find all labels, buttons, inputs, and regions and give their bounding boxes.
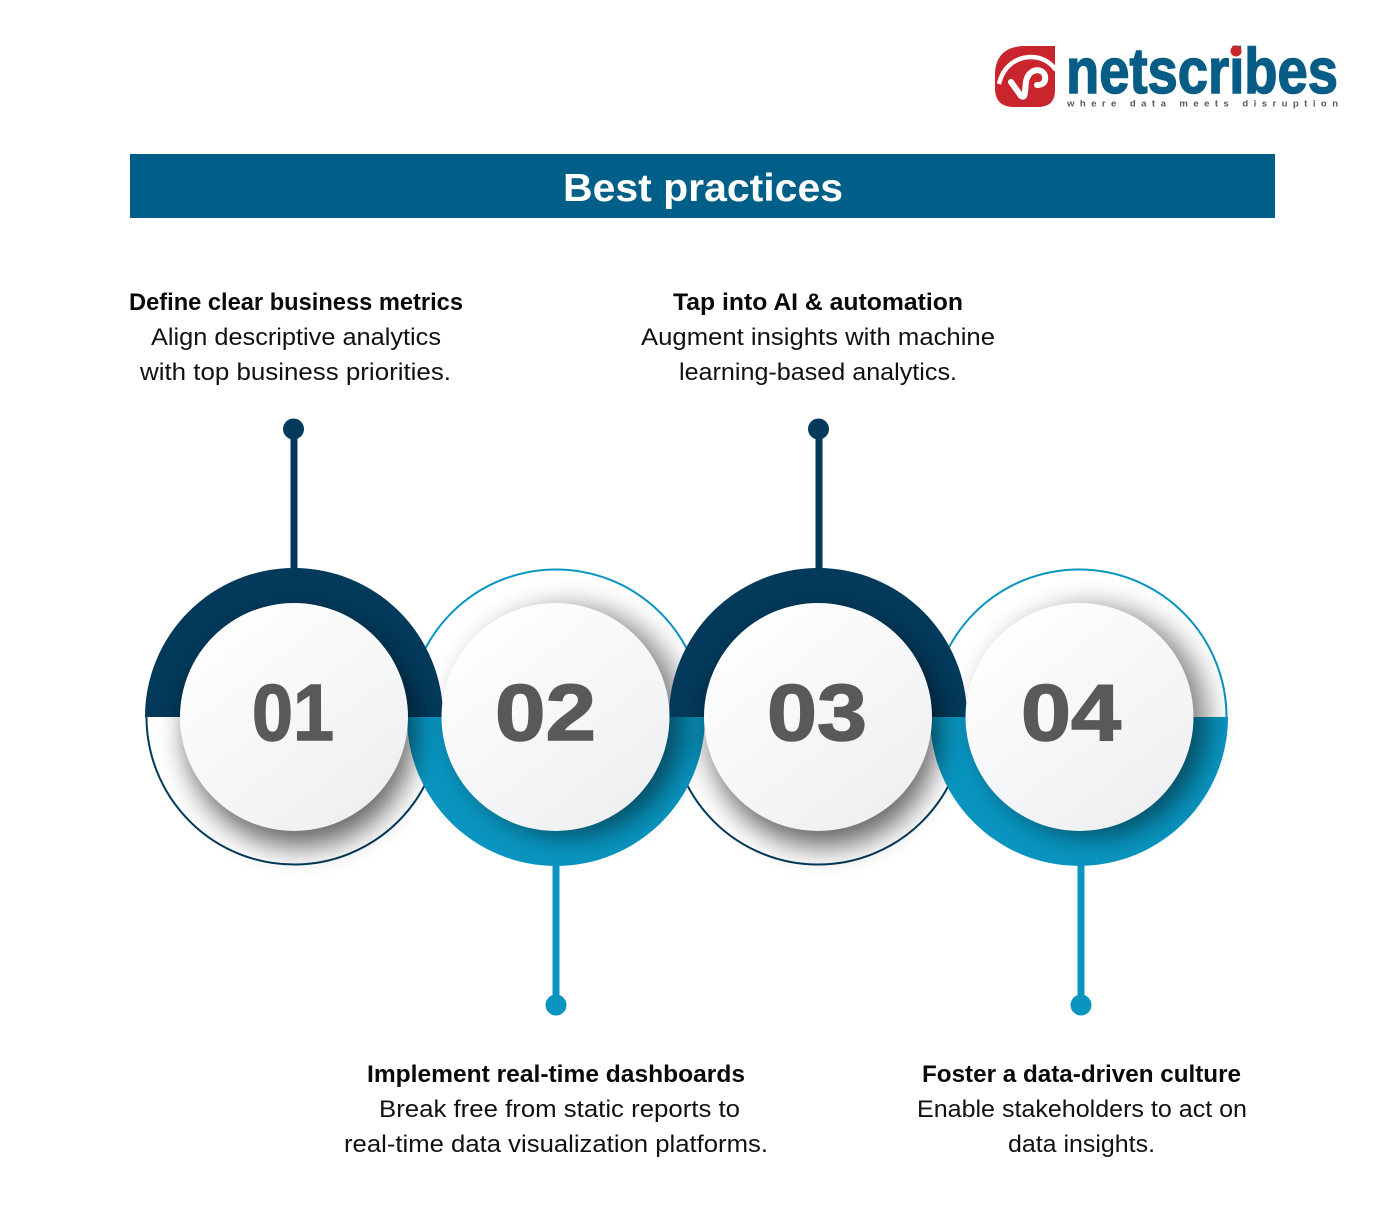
text block: step 1: Define clear business metrics: [129, 289, 463, 316]
icon: netscribes mark: [995, 46, 1056, 107]
outline: circle 2: [408, 570, 704, 864]
text block: step 3: [641, 289, 995, 386]
outline: circle 1: [146, 570, 442, 864]
connector: step 2: [546, 863, 566, 1016]
text block: step 2: Break free from static reports to: [379, 1096, 740, 1123]
text block: step 3: Tap into AI & automation: [673, 289, 963, 316]
half ring: circle 2 teal: [407, 717, 705, 866]
text block: step 1: Align descriptive analytics: [151, 324, 441, 351]
text block: step 2: [344, 1061, 768, 1158]
number 02: 02: [495, 668, 596, 757]
text block: step 3: Augment insights with machine: [641, 324, 995, 351]
half ring: circle 4 teal: [930, 717, 1228, 866]
shadow: circle 4: [979, 608, 1207, 836]
disc: circle 4: [966, 603, 1194, 831]
connector: step 1: [283, 418, 304, 571]
connector: step 3: [808, 418, 829, 571]
circle chain: [145, 568, 1228, 866]
text block: step 4: [917, 1061, 1247, 1158]
disc: circle 3: [704, 603, 932, 831]
shadow: circle 2: [456, 608, 684, 836]
disc: circle 1: [180, 603, 408, 831]
outline: circle 3: [670, 570, 966, 864]
text block: step 2: real-time data visualization platforms.: [344, 1131, 768, 1158]
logo red dot: [1230, 46, 1242, 56]
text block: step 1: [129, 289, 463, 386]
text block: step 2: Implement real-time dashboards: [367, 1061, 745, 1088]
half ring: circle 3 dark: [669, 568, 967, 717]
number 04: 04: [1021, 668, 1122, 757]
shadow: circle 3: [710, 619, 938, 847]
logo wordmark: netscribes: [1066, 35, 1338, 107]
shadow: circle 1: [186, 619, 414, 847]
title banner: Best practices: [563, 167, 843, 210]
number 03: 03: [767, 668, 867, 757]
text block: step 3: learning-based analytics.: [679, 359, 957, 386]
text block: step 1: with top business priorities.: [139, 359, 451, 386]
title banner: [130, 154, 1275, 218]
connector: step 4: [1070, 863, 1092, 1016]
number 01: 01: [252, 668, 334, 757]
text block: step 4: Foster a data-driven culture: [922, 1061, 1241, 1088]
text block: step 4: Enable stakeholders to act on: [917, 1096, 1247, 1123]
outline: circle 4: [932, 570, 1226, 864]
logo: netscribes: [995, 35, 1338, 110]
disc: circle 2: [442, 603, 670, 831]
half ring: circle 1 dark: [145, 568, 443, 717]
logo tagline: where data meets disruption: [1066, 98, 1338, 110]
text block: step 4: data insights.: [1008, 1131, 1155, 1158]
